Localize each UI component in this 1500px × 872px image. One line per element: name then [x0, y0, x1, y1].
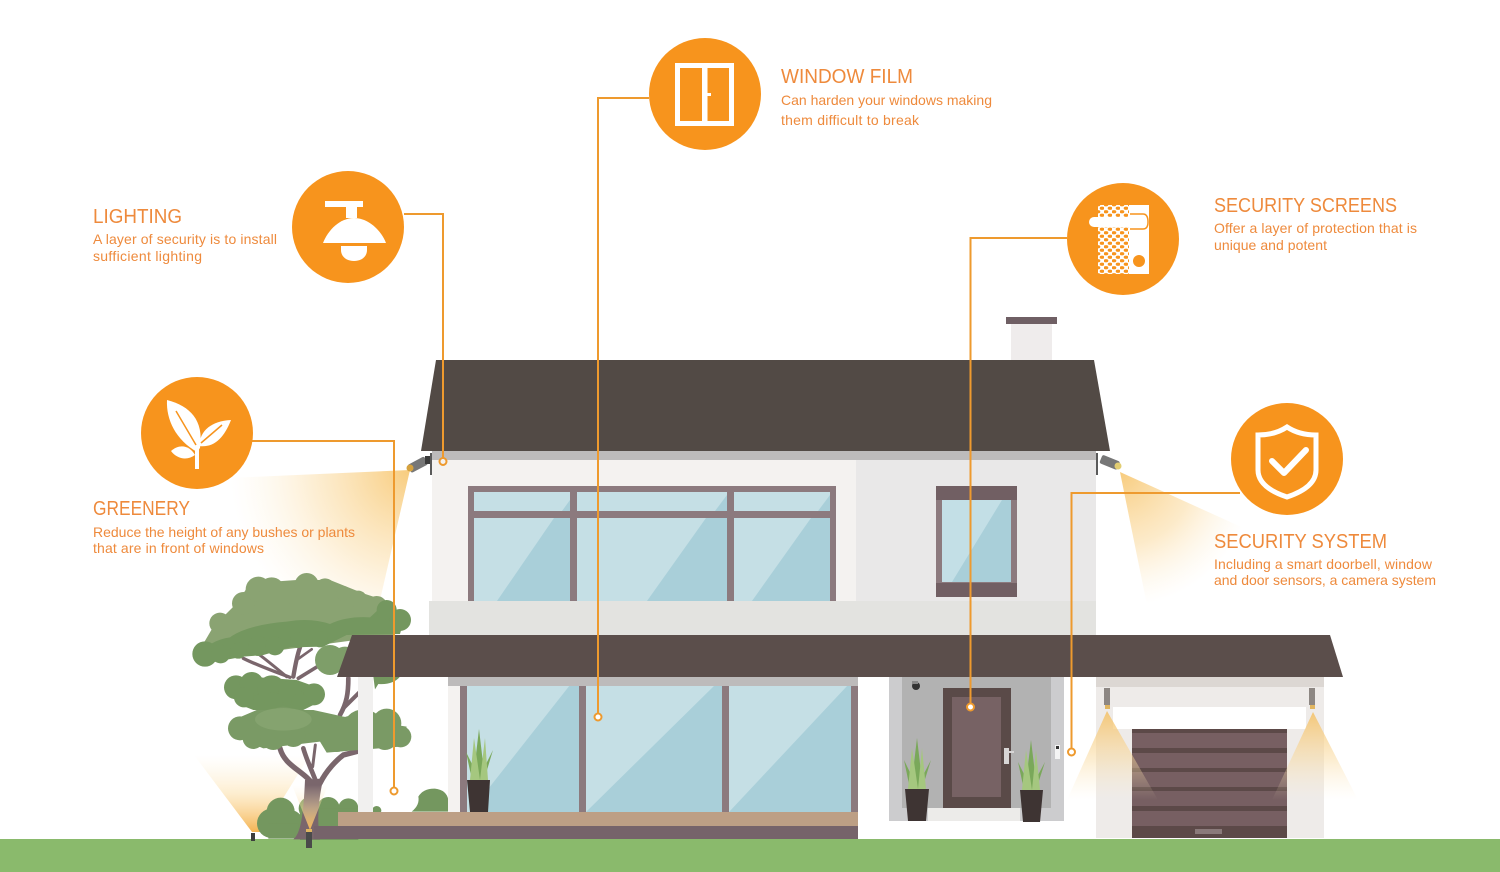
potted plant: porch [466, 729, 493, 812]
upper floor wall [432, 451, 1096, 602]
text: security system: and door sensors, a camera system [1214, 572, 1436, 588]
small upper window [936, 486, 1017, 597]
light beam: ground light by the bush [194, 755, 310, 832]
light beam: ground light under tree [292, 785, 328, 830]
text: greenery: GREENERY [93, 498, 190, 520]
potted plant: door right [1018, 740, 1045, 822]
text: window film: them difficult to break [781, 112, 920, 128]
text: greenery: Reduce the height of any bushes or plants [93, 524, 355, 540]
text: lighting: LIGHTING [93, 206, 182, 228]
connector: lighting [404, 214, 446, 465]
text: greenery [93, 498, 355, 556]
wall camera left [406, 453, 432, 475]
garage [1096, 677, 1324, 838]
garage light left with beam [1067, 688, 1158, 800]
canopy lower [228, 707, 411, 753]
text: lighting: A layer of security is to install [93, 231, 277, 247]
text: security system: SECURITY SYSTEM [1214, 531, 1387, 553]
connector: window film [594, 98, 649, 720]
ground light under tree [306, 829, 312, 848]
large upper window [468, 486, 836, 601]
front door [943, 688, 1014, 808]
text: greenery: that are in front of windows [93, 540, 264, 556]
entrance [889, 677, 1064, 821]
doorway camera [912, 681, 920, 690]
lower roof [337, 635, 1343, 677]
icon: lighting [292, 171, 404, 283]
tree [192, 573, 448, 840]
ground [0, 839, 1500, 872]
text: security screens: Offer a layer of protection that is [1214, 220, 1417, 236]
icon: security screens [1067, 183, 1179, 295]
connector: greenery [252, 441, 398, 794]
text: security screens: SECURITY SCREENS [1214, 195, 1397, 217]
door sensor [1055, 745, 1060, 759]
text: lighting [93, 206, 277, 264]
text: window film [781, 66, 992, 128]
icon: greenery [141, 377, 253, 489]
porch column [358, 677, 373, 813]
text: security system: Including a smart doorbell, window [1214, 556, 1433, 572]
garage light right with beam [1272, 688, 1358, 800]
text: window film: Can harden your windows making [781, 92, 992, 108]
text: window film: WINDOW FILM [781, 66, 913, 88]
connector: security system [1068, 493, 1240, 756]
canopy middle [224, 672, 325, 711]
text: security screens: unique and potent [1214, 237, 1327, 253]
porch deck [314, 812, 858, 839]
light beam: right wall camera [1120, 472, 1270, 610]
ground light left [251, 833, 255, 841]
icon: security system [1231, 403, 1343, 515]
text: security screens [1214, 195, 1417, 253]
wall camera right [1096, 453, 1122, 475]
icon: window film [649, 38, 761, 150]
text: security system [1214, 531, 1436, 588]
text: lighting: sufficient lighting [93, 248, 202, 264]
ground floor sliding windows [448, 677, 858, 812]
main roof [421, 360, 1110, 451]
light beam: left wall camera [228, 470, 410, 600]
canopy top [197, 573, 393, 660]
garage door [1132, 729, 1287, 838]
balcony band [429, 601, 1096, 635]
chimney [1006, 317, 1057, 360]
connector: security screens [967, 238, 1067, 710]
bushes [257, 789, 448, 840]
potted plant: door left [904, 738, 931, 821]
